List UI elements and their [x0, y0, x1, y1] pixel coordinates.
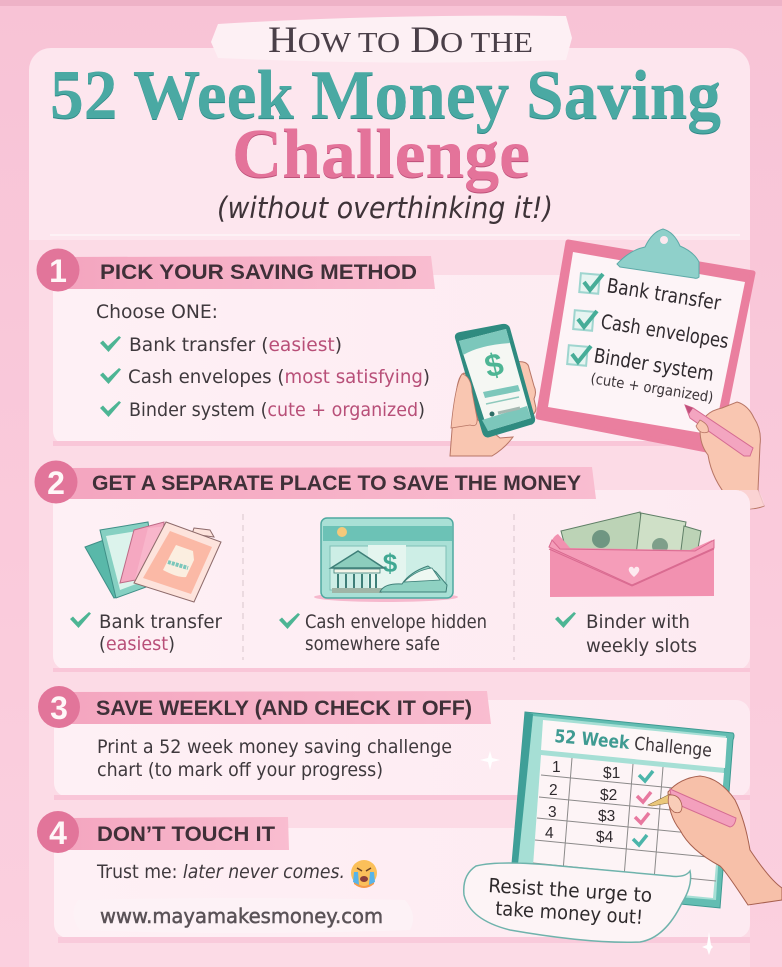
badge 2	[34, 460, 78, 504]
chart values: 3	[548, 804, 557, 821]
chart values: $3	[598, 808, 615, 825]
speech bubble	[464, 863, 691, 942]
badge 1	[36, 248, 80, 292]
heading 3: SAVE WEEKLY (AND CHECK IT OFF)	[96, 696, 472, 720]
icon: cash in pink envelope	[549, 512, 714, 597]
body 3: Print a 52 week money saving challenge	[97, 736, 452, 758]
badge 4: 4	[49, 815, 67, 851]
title tab: how to do the	[211, 16, 572, 63]
choose one list	[96, 301, 430, 421]
website pill	[73, 898, 413, 933]
chart values: 4	[545, 825, 554, 842]
chart values: 1	[552, 759, 561, 776]
text: cash envelope	[279, 611, 487, 655]
ribbon 4	[58, 817, 289, 850]
icon: folders	[85, 522, 221, 602]
ribbon 2	[58, 467, 596, 499]
choose one list: Binder system (cute + organized)	[129, 399, 425, 421]
text: bank transfer: (easiest)	[99, 633, 175, 655]
chart values: $2	[600, 787, 617, 804]
chart values: $4	[596, 829, 614, 846]
chart values: $1	[603, 765, 620, 782]
body 3	[97, 736, 452, 781]
badge 3	[38, 686, 80, 728]
card 1	[53, 275, 750, 445]
chart title: 52 Week Challenge	[554, 726, 713, 762]
icon: clipboard checklist	[538, 229, 753, 452]
checklist items: Bank transfer	[605, 273, 723, 315]
card 2	[53, 490, 750, 670]
icon: bank wallet: $	[383, 548, 398, 578]
body 3: chart (to mark off your progress)	[97, 759, 383, 781]
ribbon 1	[58, 256, 435, 289]
title: challenge: Challenge	[232, 116, 530, 193]
section 3: save weekly	[38, 686, 750, 800]
chart values	[545, 759, 620, 846]
section 4: don't touch it	[37, 811, 750, 943]
section 1: pick your saving method	[36, 248, 750, 446]
heading 1: PICK YOUR SAVING METHOD	[100, 260, 417, 284]
speech bubble: take money out!	[495, 897, 644, 929]
website pill: www.mayamakesmoney.com	[100, 904, 383, 928]
card 4	[54, 828, 750, 938]
text: binder: Binder with	[586, 611, 690, 633]
speech bubble: Resist the urge to	[488, 874, 653, 907]
text: cash envelope: somewhere safe	[305, 633, 440, 655]
section 2: get a separate place	[34, 460, 750, 672]
sparkles	[480, 751, 713, 955]
title: 52 week money saving: 52 Week Money Saving	[50, 57, 721, 134]
icon: crying emoji	[351, 860, 377, 888]
card 3	[54, 700, 750, 797]
text: binder	[555, 611, 697, 657]
icon: hand holding phone: $	[481, 345, 507, 385]
heading 4: DON’T TOUCH IT	[97, 822, 275, 846]
ribbon 3	[58, 691, 491, 724]
icon: 52 week challenge chart	[510, 712, 734, 908]
chart grid	[533, 758, 724, 893]
title tab: how to do the: HOW TO DO THE	[268, 20, 533, 61]
choose one list: Cash envelopes (most satisfying)	[128, 366, 430, 388]
chart check marks	[639, 771, 653, 781]
badge 2: 2	[47, 465, 65, 501]
icon: bank wallet	[314, 518, 458, 602]
text: bank transfer: Bank transfer	[99, 611, 222, 633]
choose one list: Choose ONE:	[96, 301, 218, 323]
checklist items: Binder system	[592, 343, 715, 386]
badge 3: 3	[50, 690, 68, 726]
badge 4	[37, 811, 79, 853]
body 4: Trust me: later never comes.	[96, 861, 345, 883]
icon: hand with pen over chart	[648, 776, 782, 905]
text: cash envelope: Cash envelope hidden	[305, 611, 487, 633]
clip	[617, 229, 699, 278]
chart values: 2	[549, 782, 558, 799]
text: binder: weekly slots	[586, 635, 697, 657]
choose one list: Bank transfer (easiest)	[129, 334, 342, 356]
text: bank transfer	[70, 611, 222, 655]
checklist items: Cash envelopes	[599, 309, 730, 353]
icon: hand holding phone	[450, 324, 536, 456]
title block	[50, 16, 721, 225]
heading 2: GET A SEPARATE PLACE TO SAVE THE MONEY	[92, 471, 581, 495]
checklist items	[567, 273, 730, 406]
icon: hand writing with pen	[685, 402, 764, 510]
badge 1: 1	[49, 253, 67, 289]
subtitle: (without overthinking it!)	[217, 191, 553, 225]
checklist items: (cute + organized)	[589, 371, 714, 406]
